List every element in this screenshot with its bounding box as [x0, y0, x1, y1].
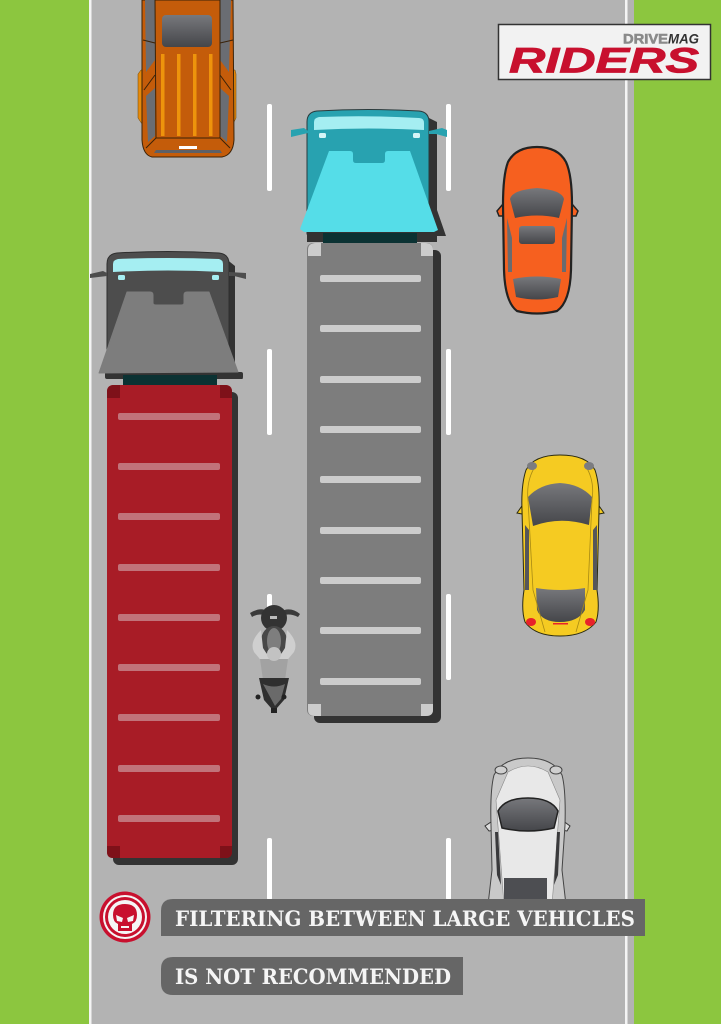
lorry shadow: [113, 392, 238, 865]
lorry trailer: [307, 243, 433, 716]
warning banner line 1: FILTERING BETWEEN LARGE VEHICLES: [175, 907, 635, 932]
yellow car: [517, 455, 604, 636]
warning banner line 2: IS NOT RECOMMENDED: [175, 965, 451, 990]
orange car: [497, 147, 578, 314]
motorcycle with rider: [250, 605, 300, 713]
logo: Drivemag Riders: MAG: [668, 32, 699, 46]
logo wordmark: Drivemag: DRIVE: [623, 32, 668, 46]
lorry cab: [107, 252, 229, 376]
right grass verge: [634, 0, 721, 1024]
lorry shadow: [314, 250, 441, 723]
logo wordmark: Riders: RIDERS: [509, 42, 699, 80]
icon: skull warning badge: [100, 892, 150, 942]
white car: [485, 758, 570, 905]
warning banner line 1: [161, 899, 645, 936]
red lorry: [90, 252, 246, 865]
lorry trailer: [107, 385, 232, 858]
warning banner line 2: [161, 957, 463, 995]
logo: Drivemag Riders: [498, 24, 710, 80]
orange pickup truck: [138, 0, 236, 157]
teal lorry: [291, 110, 447, 723]
left grass verge: [0, 0, 89, 1024]
lorry cab: [307, 110, 429, 234]
